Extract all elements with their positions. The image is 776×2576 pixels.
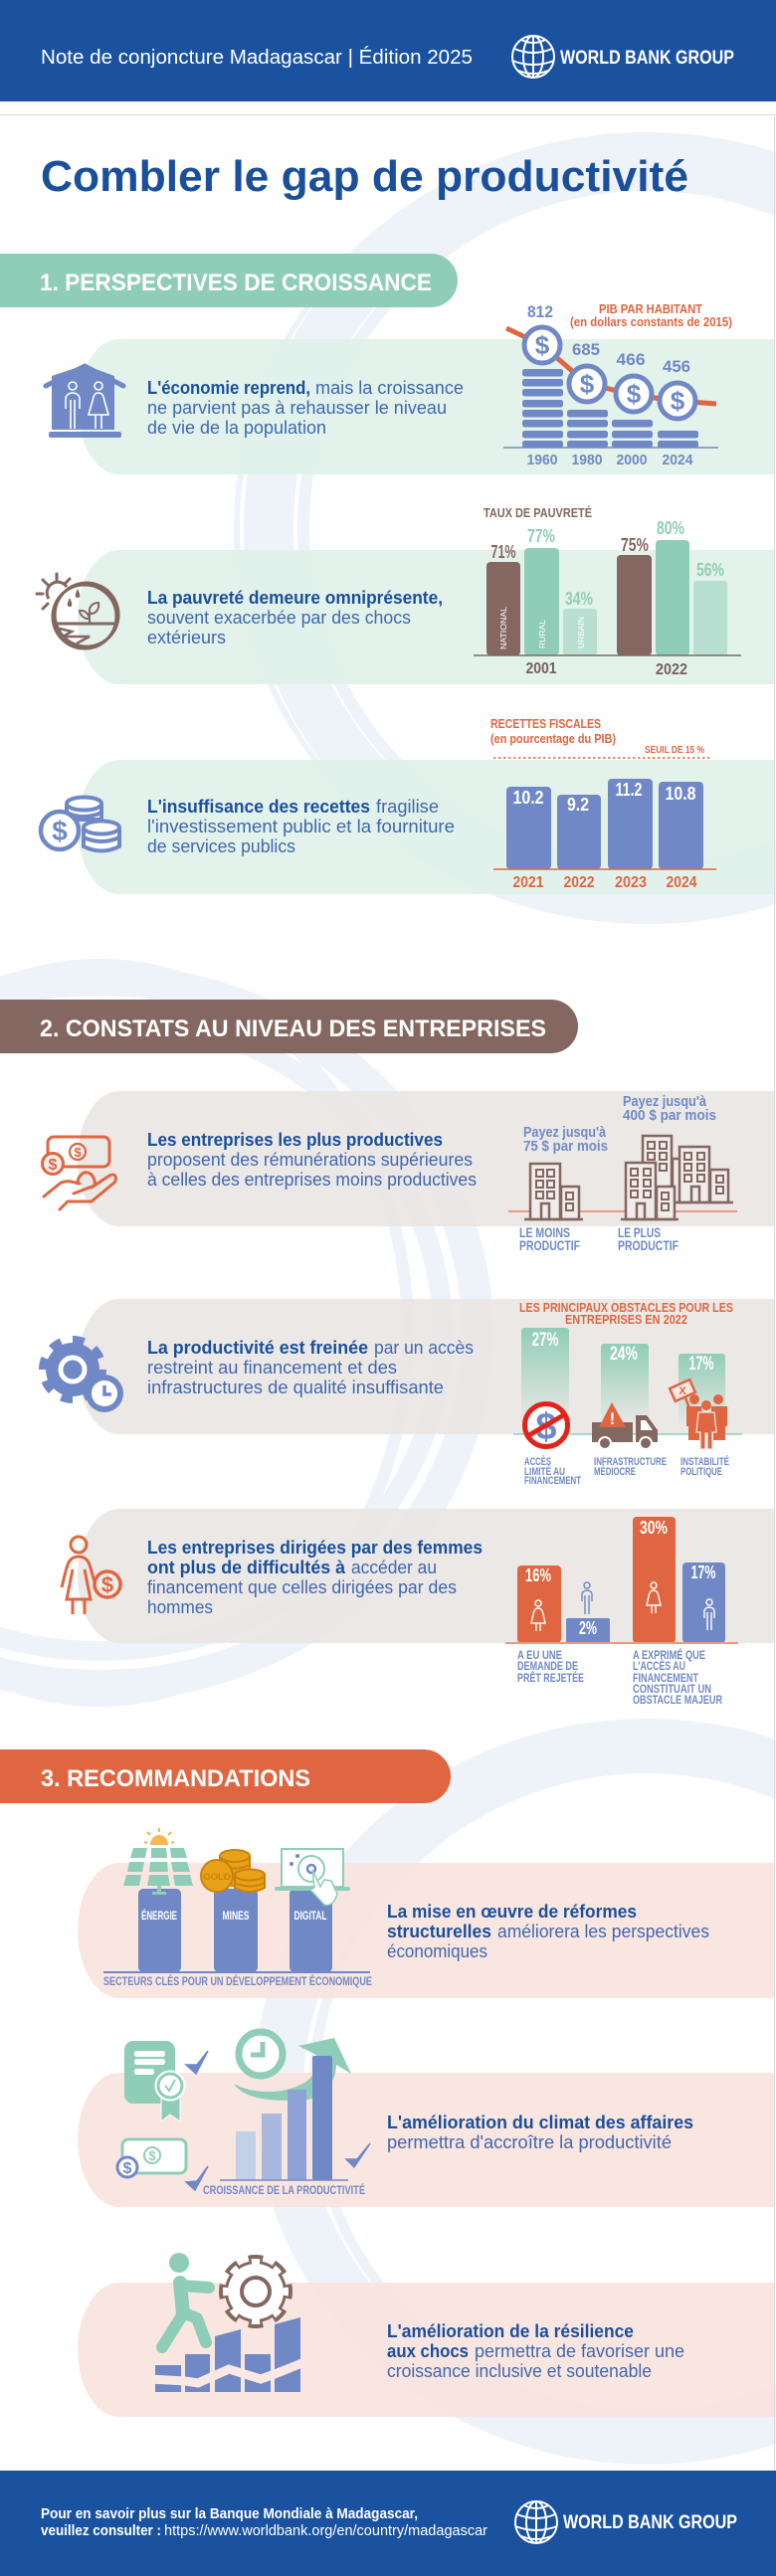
text: structural reforms: structurelles	[387, 1922, 491, 1941]
chart: women vs men access to finance: OBSTACLE MAJEUR	[633, 1693, 722, 1707]
chart: women vs men access to finance	[505, 1517, 738, 1707]
icon: woman with coin	[62, 1537, 120, 1614]
chart: main obstacles: LIMITÉ AU	[524, 1465, 565, 1478]
chart: wages by productivity: LE MOINS	[519, 1224, 570, 1240]
text: women-led firms: Les entreprises dirigées par des femmes	[147, 1538, 483, 1558]
chart: recettes fiscales: 10.2	[513, 788, 543, 808]
chart: taux de pauvreté: TAUX DE PAUVRETÉ	[484, 505, 592, 520]
text: women-led firms	[147, 1538, 483, 1617]
chart: PIB par habitant: 456	[663, 357, 690, 376]
chart: taux de pauvreté: 56%	[696, 560, 724, 580]
text: productivity constraints: infrastructures de qualité insuffisante	[147, 1378, 444, 1397]
chart: recettes fiscales: RECETTES FISCALES	[490, 716, 601, 731]
chart: women vs men access to finance: A EU UNE	[517, 1648, 562, 1662]
icon: gear and clock	[43, 1340, 123, 1412]
chart: key sectors: SECTEURS CLÉS POUR UN DÉVELOPPEMENT ÉCONOMIQUE	[103, 1973, 372, 1988]
icon: banknote and coin	[117, 2139, 186, 2177]
chart: PIB par habitant: 2000	[617, 452, 647, 468]
panel: productivity constraints	[43, 1299, 774, 1487]
chart: women vs men access to finance: 16%	[525, 1565, 551, 1585]
panel: resilience	[78, 2253, 774, 2417]
icon: gold coins: GOLD	[203, 1872, 231, 1883]
text: business climate: permettra d'accroître la productivité	[387, 2132, 672, 2152]
chart: PIB par habitant: $	[535, 330, 550, 360]
chart: main obstacles: INFRASTRUCTURE	[594, 1456, 667, 1468]
chart: recettes fiscales	[490, 716, 716, 891]
chart: women vs men access to finance: FINANCEMENT	[633, 1671, 699, 1685]
chart: PIB par habitant: 685	[572, 340, 600, 359]
chart: PIB par habitant: $	[671, 386, 685, 416]
icon: truck and warning: !	[610, 1409, 615, 1428]
icon: money over hand	[42, 1137, 115, 1209]
section heading 1	[0, 254, 458, 307]
section heading 3	[0, 1749, 451, 1803]
panel: productive firms	[42, 1091, 774, 1253]
chart: main obstacles: FINANCEMENT	[524, 1475, 581, 1487]
header title: Note de conjoncture Madagascar | Édition 2025	[41, 46, 473, 69]
text: productivity constraints	[147, 1338, 474, 1397]
logo: World Bank Group: WORLD BANK GROUP	[563, 2512, 737, 2533]
bars 2001	[486, 548, 597, 655]
text: poverty: souvent exacerbée par des chocs	[147, 608, 411, 628]
bars 2022	[617, 540, 727, 655]
icon: clock and growth arrow	[234, 2032, 351, 2101]
icon: protesters: X	[679, 1385, 686, 1397]
icon: dollar mark: $	[52, 816, 68, 846]
icon: drought and plant	[37, 574, 118, 648]
icon: protesters	[670, 1380, 727, 1449]
chart: women vs men access to finance: DEMANDE DE	[517, 1659, 578, 1673]
text: women-led firms: accéder au	[351, 1558, 437, 1577]
text: productivity constraints: restreint au financement et des	[147, 1358, 397, 1378]
text: productivity constraints: par un accès	[374, 1338, 474, 1358]
panel: revenue	[41, 716, 774, 894]
large building cluster	[621, 1136, 733, 1219]
chart: main obstacles: POLITIQUE	[680, 1466, 722, 1478]
text: business climate: L'amélioration du climat des affaires	[387, 2113, 693, 2132]
section heading 1: 1. PERSPECTIVES DE CROISSANCE	[40, 270, 432, 296]
text: economy: de vie de la population	[147, 418, 326, 438]
chart: PIB par habitant: 2024	[663, 452, 693, 468]
chart: women vs men access to finance: L'ACCÈS AU	[633, 1658, 685, 1673]
chart: main obstacles: INSTABILITÉ	[680, 1455, 729, 1468]
chart title: (en dollars constants de 2015)	[570, 315, 732, 329]
logo: World Bank Group	[515, 2501, 737, 2543]
icon: person climbing with gear	[149, 2253, 304, 2392]
chart: key sectors: ÉNERGIE	[141, 1908, 177, 1923]
panel: structural reforms	[78, 1828, 774, 1998]
chart: wages by productivity: Payez jusqu'à	[523, 1124, 607, 1141]
footer text: Pour en savoir plus sur la Banque Mondiale à Madagascar,	[41, 2505, 418, 2522]
text: women-led firms: financement que celles dirigées par des	[147, 1577, 457, 1597]
chart: recettes fiscales: 2022	[563, 874, 595, 891]
text: economy: ne parvient pas à rehausser le niveau	[147, 398, 447, 418]
icon: no money	[525, 1404, 567, 1448]
chart: taux de pauvreté	[474, 505, 741, 678]
chart: women vs men access to finance: A EXPRIMÉ QUE	[633, 1647, 705, 1662]
chart: productivity growth: CROISSANCE DE LA PRODUCTIVITÉ	[203, 2182, 365, 2197]
bars 2001: NATIONAL	[498, 607, 508, 649]
panel: women-led firms	[62, 1509, 774, 1707]
chart: PIB par habitant: 1960	[527, 452, 557, 468]
chart: taux de pauvreté: 77%	[527, 526, 555, 546]
bars 2001: URBAIN	[576, 617, 586, 648]
chart: taux de pauvreté: 34%	[565, 589, 593, 609]
text: productive firms: à celles des entreprises moins productives	[147, 1170, 477, 1190]
icon: dollar marks: $	[74, 1145, 82, 1160]
text: economy: L'économie reprend,	[147, 378, 310, 398]
text: poverty: extérieurs	[147, 628, 226, 647]
chart: recettes fiscales: 2023	[615, 874, 647, 891]
icon: dollar marks: $	[49, 1157, 58, 1174]
chart: recettes fiscales: (en pourcentage du PIB)	[490, 731, 616, 746]
chart: PIB par habitant	[503, 302, 732, 468]
icon: dollar marks	[49, 1145, 82, 1174]
chart: main obstacles	[513, 1300, 742, 1487]
chart: main obstacles: 24%	[610, 1344, 638, 1365]
chart: taux de pauvreté: 2022	[656, 661, 687, 678]
chart: recettes fiscales: SEUIL DE 15 %	[645, 744, 705, 756]
small building	[524, 1164, 583, 1219]
section heading 2	[0, 1000, 578, 1053]
text: economy	[147, 378, 464, 438]
text: resilience: croissance inclusive et soutenable	[387, 2361, 652, 2381]
text: resilience: permettra de favoriser une	[475, 2341, 684, 2361]
chart: key sectors: DIGITAL	[294, 1909, 326, 1923]
chart: wages by productivity: PRODUCTIF	[519, 1237, 580, 1253]
chart: taux de pauvreté: 2001	[525, 660, 557, 677]
text: revenue: fragilise	[376, 797, 439, 817]
header band	[0, 0, 776, 101]
chart: PIB par habitant: 812	[527, 302, 553, 321]
chart: women vs men access to finance: 17%	[690, 1563, 716, 1582]
chart title: PIB PAR HABITANT	[599, 302, 702, 316]
icon: truck and warning	[592, 1402, 658, 1449]
chart: recettes fiscales: 9.2	[567, 795, 589, 815]
text: poverty	[147, 588, 443, 647]
chart: recettes fiscales: 2021	[513, 874, 544, 891]
chart: wages by productivity: Payez jusqu'à	[623, 1093, 707, 1110]
chart: taux de pauvreté: 75%	[621, 535, 649, 555]
footer band	[0, 2471, 776, 2576]
text: structural reforms: économiques	[387, 1941, 487, 1961]
text: structural reforms	[387, 1902, 709, 1961]
chart: main obstacles: ENTREPRISES EN 2022	[565, 1312, 687, 1327]
text: productive firms: Les entreprises les plus productives	[147, 1130, 443, 1150]
logo: World Bank Group: WORLD BANK GROUP	[560, 48, 734, 69]
chart: productivity growth	[203, 2056, 365, 2197]
footer text: https://www.worldbank.org/en/country/madagascar	[164, 2522, 487, 2539]
chart: wages by productivity: PRODUCTIF	[618, 1237, 679, 1253]
chart: wages by productivity: 75 $ par mois	[523, 1138, 608, 1155]
chart: main obstacles: 27%	[531, 1330, 559, 1351]
icon: check mark	[186, 2051, 208, 2074]
chart: key sectors: MINES	[223, 1909, 249, 1923]
icon: banknote and coin: $	[123, 2160, 132, 2177]
chart: women vs men access to finance: CONSTITUAIT UN	[633, 1682, 711, 1696]
text: resilience: aux chocs	[387, 2341, 469, 2361]
chart: wages by productivity	[508, 1093, 737, 1253]
chart: PIB par habitant: $	[580, 369, 595, 399]
section heading 3: 3. RECOMMANDATIONS	[41, 1765, 310, 1792]
panel: business climate	[78, 2032, 774, 2207]
text: productive firms	[147, 1130, 477, 1190]
text: revenue: l'investissement public et la fourniture	[147, 817, 455, 836]
chart: main obstacles: LES PRINCIPAUX OBSTACLES POUR LES	[519, 1300, 733, 1315]
section heading 2: 2. CONSTATS AU NIVEAU DES ENTREPRISES	[40, 1015, 546, 1042]
icon: dollar mark: $	[101, 1572, 113, 1597]
text: revenue	[147, 797, 455, 856]
icon: house with people	[46, 365, 123, 438]
chart: women vs men access to finance: 30%	[640, 1518, 668, 1538]
footer text: veuillez consulter :	[41, 2522, 161, 2539]
text: resilience: L'amélioration de la résilience	[387, 2321, 634, 2341]
icon: check mark	[186, 2166, 208, 2190]
icon: banknote and coin: $	[148, 2148, 156, 2163]
chart: recettes fiscales: 10.8	[665, 784, 696, 804]
chart: key sectors	[103, 1828, 372, 1988]
chart: PIB par habitant: $	[627, 379, 642, 409]
icon: laptop and hand	[275, 1849, 350, 1905]
text: women-led firms: ont plus de difficultés à	[147, 1558, 346, 1577]
chart: main obstacles: 17%	[688, 1354, 714, 1375]
chart: wages by productivity: 400 $ par mois	[623, 1107, 716, 1124]
chart title	[570, 302, 732, 329]
text: structural reforms: améliorera les perspectives	[497, 1922, 709, 1941]
text: revenue: L'insuffisance des recettes	[147, 797, 370, 817]
text: women-led firms: hommes	[147, 1597, 213, 1617]
panel: economy	[46, 302, 774, 474]
text: poverty: La pauvreté demeure omniprésente,	[147, 588, 443, 608]
chart: taux de pauvreté: 80%	[657, 518, 684, 538]
chart: main obstacles: ACCÈS	[524, 1455, 551, 1468]
chart: wages by productivity: LE PLUS	[618, 1224, 661, 1240]
text: productivity constraints: La productivité est freinée	[147, 1338, 368, 1358]
bars 2001: RURAL	[537, 620, 547, 648]
chart: recettes fiscales: 2024	[667, 874, 697, 891]
chart: PIB par habitant: 466	[617, 350, 645, 369]
chart: women vs men access to finance: PRÊT REJETÉE	[517, 1670, 584, 1685]
icon: check mark	[346, 2143, 370, 2167]
text: business climate	[387, 2113, 693, 2152]
logo: World Bank Group	[512, 36, 734, 78]
chart: women vs men access to finance: 2%	[579, 1618, 597, 1638]
text: structural reforms: La mise en œuvre de réformes	[387, 1902, 637, 1922]
page title: Combler le gap de productivité	[41, 152, 688, 201]
chart: recettes fiscales: 11.2	[615, 780, 643, 800]
text: revenue: de services publics	[147, 836, 295, 856]
chart: PIB par habitant: 1980	[571, 452, 603, 468]
footer text	[41, 2505, 487, 2539]
icon: coins stacks	[41, 798, 119, 851]
icon: no money: $	[535, 1406, 557, 1448]
chart: main obstacles: MÉDIOCRE	[594, 1465, 636, 1478]
panel: poverty	[37, 505, 774, 684]
chart: taux de pauvreté: 71%	[491, 542, 515, 562]
icon: certificate	[124, 2041, 185, 2121]
icon: gold coins	[201, 1850, 265, 1892]
text: productive firms: proposent des rémunérations supérieures	[147, 1150, 473, 1170]
text: economy: mais la croissance	[315, 378, 464, 398]
text: resilience	[387, 2321, 684, 2381]
icon: solar panel	[123, 1828, 193, 1895]
